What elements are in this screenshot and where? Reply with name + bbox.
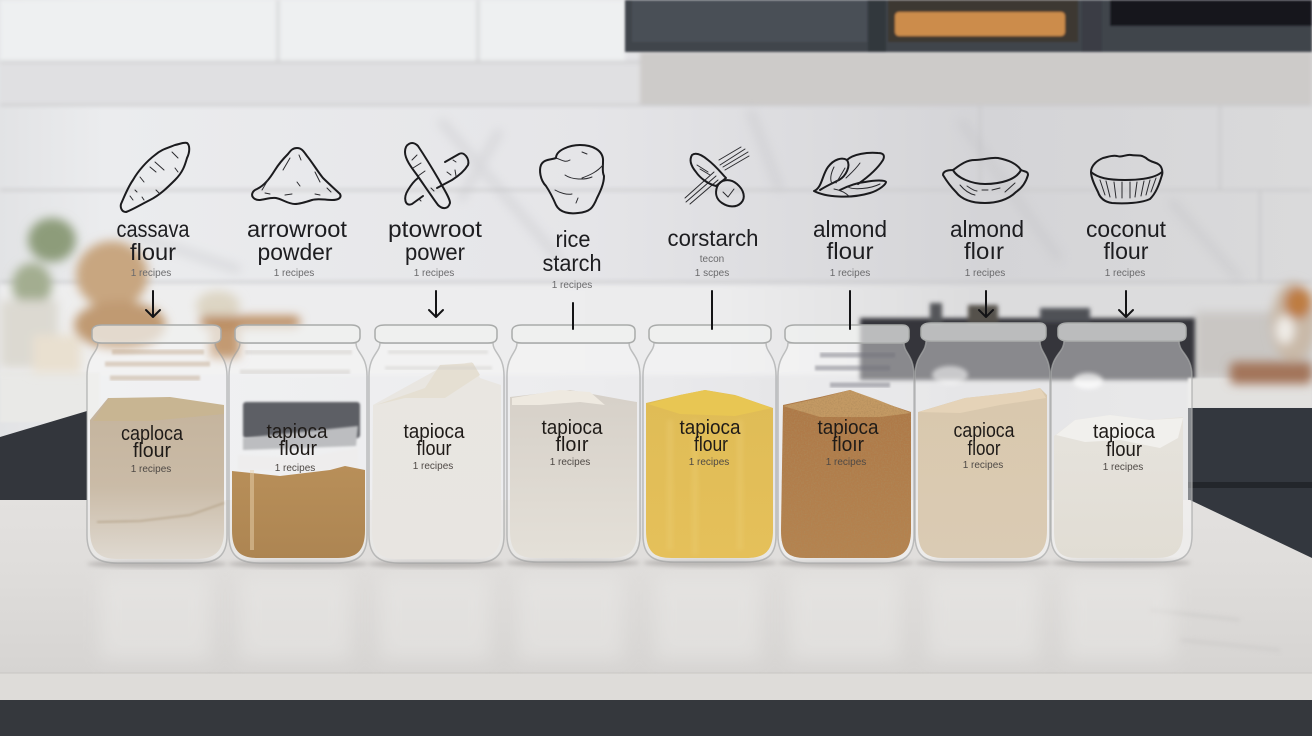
label: almond flour: almond	[813, 216, 887, 242]
label: ptowroot power: power	[405, 239, 465, 265]
line: corstarch	[711, 291, 713, 329]
label: cassava flour: 1 recipes	[131, 268, 171, 279]
label: almond flour: 1 recipes	[830, 268, 870, 279]
arrow: ptowroot	[429, 291, 443, 317]
jar 5: tapioca flour: 1 recipes	[689, 457, 729, 468]
jar 6: almond-toned flour	[778, 325, 914, 563]
jar 3: tapioca flour: flour	[416, 438, 452, 460]
label: cassava flour	[116, 216, 190, 279]
blurred jar right	[1230, 282, 1312, 384]
jar 6: almond-toned flour: 1 recipes	[826, 457, 866, 468]
label: almond flour second: almond	[950, 216, 1024, 242]
jar 5: tapioca flour	[643, 325, 776, 562]
blurred bread	[74, 241, 300, 358]
label: almond flour second	[950, 216, 1024, 279]
jar 1: caploca flour: 1 recipes	[131, 464, 171, 475]
label: corstarch	[668, 225, 758, 279]
jar 1: caploca flour: caploca	[121, 423, 184, 445]
label: ptowroot power: ptowroot	[388, 216, 483, 242]
icon: crossed roots	[405, 143, 468, 208]
jar 8: tapioca flour: 1 recipes	[1103, 462, 1143, 473]
blurred plant	[0, 218, 81, 373]
label: almond flour second: floır	[964, 238, 1004, 264]
label: ptowroot power: 1 recipes	[414, 268, 454, 279]
jar 3: tapioca flour: tapioca	[404, 421, 465, 443]
back left counter	[0, 372, 100, 500]
label: corstarch: 1 scpes	[695, 268, 729, 279]
upper cabinet	[625, 0, 1312, 52]
jar 4: tapioca flour: tapioca	[542, 417, 603, 439]
jar 2: tapioca flour: 1 recipes	[275, 463, 315, 474]
label: arrowroot powder	[247, 216, 348, 279]
label: rice starch	[542, 226, 602, 291]
icon: rice starch lump	[540, 145, 604, 213]
label: coconut flour	[1086, 216, 1167, 279]
arrow: cassava	[146, 291, 160, 317]
icon: almonds	[814, 153, 886, 197]
label: almond flour second: 1 recipes	[965, 268, 1005, 279]
label: almond flour	[813, 216, 887, 279]
label: rice starch: starch	[542, 250, 602, 276]
label: rice starch: 1 recipes	[552, 280, 592, 291]
label: ptowroot power	[388, 216, 483, 279]
jar 1: caploca flour	[87, 325, 227, 563]
icon: corn and stalks	[685, 147, 749, 206]
jar 6: almond-toned flour: tapioca	[818, 417, 879, 439]
blurred stove	[860, 303, 1195, 380]
jar 7: capioca floor: 1 recipes	[963, 460, 1003, 471]
jar 1: caploca flour: flour	[133, 440, 171, 462]
jar 8: tapioca flour: flour	[1106, 439, 1142, 461]
label: arrowroot powder: 1 recipes	[274, 268, 314, 279]
label: rice starch: rice	[556, 226, 590, 252]
arrow: almond	[979, 291, 993, 317]
jar 3: tapioca flour	[369, 325, 504, 563]
label: cassava flour: cassava	[116, 216, 190, 242]
jar 7: capioca floor: floor	[968, 438, 1001, 460]
jar reflections	[100, 575, 1175, 660]
label: corstarch: corstarch	[668, 225, 758, 251]
arrow: coconut	[1119, 291, 1133, 317]
jar 2: tapioca flour: tapioca	[266, 421, 328, 443]
jar 5: tapioca flour: tapioca	[680, 417, 741, 439]
jar contact shadows	[87, 559, 1191, 568]
jar 6: almond-toned flour: floır	[832, 434, 864, 456]
jar 2: tapioca flour	[229, 325, 367, 563]
jar 4: tapioca flour: floır	[556, 434, 589, 456]
label: coconut flour: coconut	[1086, 216, 1167, 242]
jar 8: tapioca flour: tapioca	[1093, 421, 1156, 443]
label: corstarch: tecon	[700, 254, 724, 265]
jar 2: tapioca flour: flour	[279, 438, 317, 460]
jar 8: tapioca flour	[1051, 323, 1192, 562]
icon: coconut bowl	[1091, 155, 1162, 203]
line: rice starch	[572, 303, 574, 329]
jar 4: tapioca flour	[507, 325, 640, 562]
back right counter	[1188, 378, 1312, 563]
label: arrowroot powder: arrowroot	[247, 216, 348, 242]
jar 7: capioca floor	[915, 323, 1050, 562]
label: cassava flour: flour	[130, 239, 176, 265]
icon: cassava root	[121, 143, 189, 212]
kitchen backdrop	[0, 0, 1312, 563]
jar 4: tapioca flour: 1 recipes	[550, 457, 590, 468]
jar 3: tapioca flour: 1 recipes	[413, 461, 453, 472]
jar 5: tapioca flour: flour	[694, 434, 728, 456]
icon: bowl	[943, 158, 1028, 203]
label: coconut flour: 1 recipes	[1105, 268, 1145, 279]
right wall haze	[1195, 312, 1312, 378]
icon: arrowroot pile	[252, 148, 341, 204]
label: almond flour: flour	[826, 238, 874, 264]
label: coconut flour: flour	[1104, 238, 1149, 264]
jar 7: capioca floor: capioca	[954, 420, 1015, 442]
marble counter	[0, 500, 1312, 736]
line: almond flour	[849, 291, 851, 329]
label: arrowroot powder: powder	[258, 239, 333, 265]
